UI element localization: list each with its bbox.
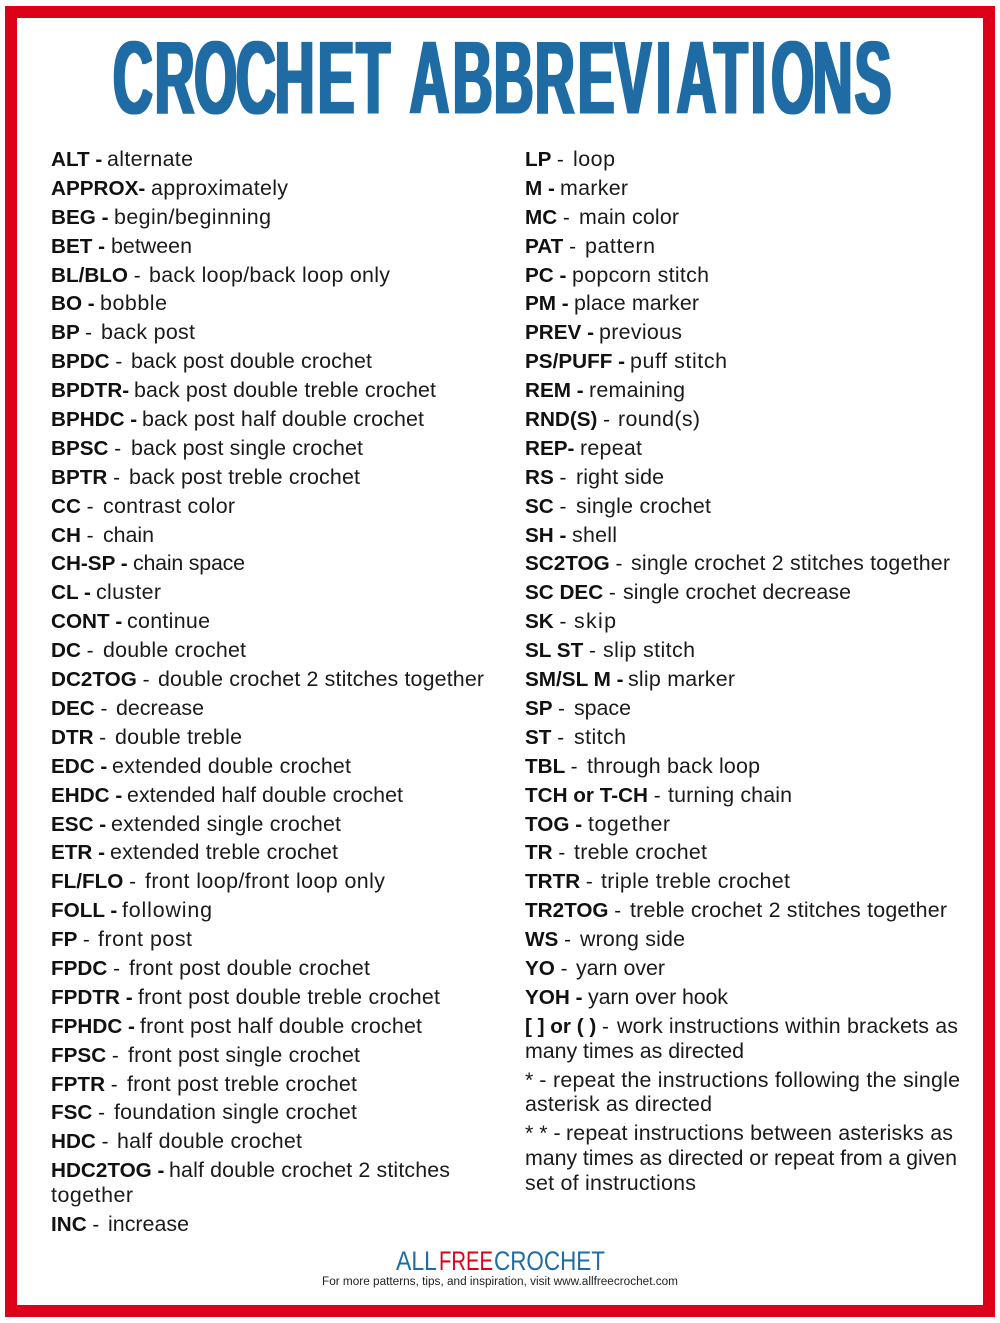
entry: MC: MC - [525, 206, 570, 229]
entry: CONT: CONT - [51, 610, 122, 633]
entry: BEG: BEG - [51, 206, 109, 229]
entry: PM: PM - [525, 292, 569, 315]
entry: REM [525, 378, 685, 402]
entry: SC DEC: single crochet decrease [623, 580, 851, 604]
entry: ST: ST - [525, 726, 564, 749]
entry: SK: SK - [525, 610, 566, 633]
entry: RS: RS - [525, 466, 566, 489]
entry: DTR: DTR - [51, 726, 106, 749]
entry: REP: repeat [580, 436, 642, 460]
note: single asterisk [525, 1068, 960, 1116]
entry: BPDC: BPDC - [51, 350, 122, 373]
entry: BPDTR: BPDTR- [51, 379, 129, 402]
entry: TBL: through back loop [587, 754, 760, 778]
note: double asterisk: many times as directed or repeat from a given [525, 1146, 957, 1170]
entry: PREV: previous [599, 320, 682, 344]
entry: SM/SL M: SM/SL M - [525, 668, 624, 691]
entry: BL/BLO: BL/BLO - [51, 264, 141, 287]
entry: APPROX: APPROX- [51, 177, 145, 200]
entry: DC2TOG: DC2TOG - [51, 668, 149, 691]
entry: APPROX [51, 176, 288, 200]
entry: EDC: EDC - [51, 755, 107, 778]
entry: WS [525, 927, 685, 951]
entry: LP: LP - [525, 148, 564, 171]
entry: DC: DC - [51, 639, 94, 662]
entry: CL [51, 580, 161, 604]
entry: BET: BET - [51, 235, 105, 258]
entry: TCH or T-CH: turning chain [668, 783, 792, 807]
entry: PC: PC - [525, 264, 566, 287]
entry: CH: chain [103, 523, 154, 547]
entry: BL/BLO: back loop/back loop only [149, 263, 390, 287]
entry: FPDC: front post double crochet [129, 956, 370, 980]
entry: FP: front post [98, 927, 192, 951]
entry: PAT: pattern [585, 234, 655, 258]
entry: BPSC: back post single crochet [131, 436, 363, 460]
entry: REP: REP- [525, 437, 575, 460]
entry: HDC2TOG: HDC2TOG - [51, 1159, 165, 1182]
entry: CC: contrast color [103, 494, 235, 518]
entry: FPDC: FPDC - [51, 957, 120, 980]
entry: SC2TOG: SC2TOG - [525, 552, 622, 575]
entry: DEC: decrease [116, 696, 204, 720]
footer tagline: For more patterns, tips, and inspiration, visit www.allfreecrochet.com [322, 1276, 678, 1288]
entry: INC [51, 1212, 189, 1236]
entry: SC DEC: SC DEC - [525, 581, 616, 604]
entry: CH-SP: CH-SP - [51, 552, 128, 575]
entry: BP: back post [101, 320, 195, 344]
entry: HDC: half double crochet [117, 1129, 302, 1153]
entry: PAT: PAT - [525, 235, 576, 258]
entry: YOH: yarn over hook [588, 985, 728, 1009]
entry: CL: CL - [51, 581, 91, 604]
entry: DEC: DEC - [51, 697, 107, 720]
entry: CH: CH - [51, 524, 94, 547]
footer logo: ALL [396, 1246, 437, 1276]
entry: SM/SL M: slip marker [628, 667, 735, 691]
entry: REM: REM - [525, 379, 584, 402]
entry: TR2TOG: TR2TOG - [525, 899, 621, 922]
entry: PS/PUFF: puff stitch [630, 349, 727, 373]
entry: TRTR: triple treble crochet [601, 869, 790, 893]
entry: REM: remaining [589, 378, 685, 402]
entry: TOG: TOG - [525, 813, 582, 836]
entry: DTR [51, 725, 242, 749]
entry: FP: FP - [51, 928, 90, 951]
entry: CH [51, 523, 154, 547]
entry: FL/FLO: FL/FLO - [51, 870, 136, 893]
entry: BO: BO - [51, 292, 95, 315]
entry: EHDC: extended half double crochet [127, 783, 403, 807]
entry: BEG: begin/beginning [114, 205, 271, 229]
entry: YO [525, 956, 665, 980]
entry: FOLL [51, 898, 212, 922]
entry: SC: SC - [525, 495, 566, 518]
note: single asterisk: repeat the instructions following the single [553, 1068, 960, 1092]
entry: ST: stitch [574, 725, 626, 749]
entry: RS [525, 465, 664, 489]
entry: ESC: ESC - [51, 813, 106, 836]
entry: SL ST: slip stitch [603, 638, 695, 662]
entry: DC2TOG: double crochet 2 stitches together [158, 667, 484, 691]
entry: LP [525, 147, 615, 171]
entry: RS: right side [576, 465, 664, 489]
entry: SL ST: SL ST - [525, 639, 596, 662]
entry: YOH: YOH - [525, 986, 583, 1009]
entry: ALT [51, 147, 193, 171]
entry: DEC [51, 696, 204, 720]
entry: ESC: extended single crochet [111, 812, 341, 836]
entry: ALT: ALT - [51, 148, 102, 171]
note: brackets: work instructions within brackets as [616, 1014, 958, 1038]
entry: WS: WS - [525, 928, 571, 951]
entry: SP [525, 696, 631, 720]
entry: INC: INC - [51, 1213, 99, 1236]
entry: EDC: extended double crochet [112, 754, 351, 778]
note: double asterisk: repeat instructions between asterisks as [566, 1121, 953, 1145]
entry: CC: CC - [51, 495, 94, 518]
entry: PAT [525, 234, 655, 258]
entry: RND(S): round(s) [618, 407, 700, 431]
entry: M [525, 176, 628, 200]
entry: PS/PUFF: PS/PUFF - [525, 350, 625, 373]
entry: PC: popcorn stitch [572, 263, 709, 287]
title: CROCHET ABBREVIATIONS [113, 20, 891, 136]
entry: TR: treble crochet [574, 840, 707, 864]
entry: M: M - [525, 177, 555, 200]
entry: SK [525, 609, 616, 633]
entry: TOG: together [588, 812, 670, 836]
entry: FSC: FSC - [51, 1101, 105, 1124]
entry: FL/FLO: front loop/front loop only [145, 869, 385, 893]
entry: PREV: PREV - [525, 321, 594, 344]
entry: HDC2TOG [51, 1158, 450, 1207]
entry: YO: yarn over [576, 956, 665, 980]
entry: TR2TOG: treble crochet 2 stitches together [630, 898, 947, 922]
entry: WS: wrong side [579, 927, 685, 951]
note: single asterisk: * - [525, 1068, 546, 1092]
entry: FPTR: FPTR - [51, 1073, 118, 1096]
entry: BPDC: back post double crochet [131, 349, 372, 373]
entry: INC: increase [108, 1212, 189, 1236]
entry: DTR: double treble [115, 725, 242, 749]
entry: HDC2TOG: together [51, 1183, 133, 1207]
footer logo: FREE [439, 1246, 493, 1276]
entry: MC: main color [579, 205, 679, 229]
entry: EHDC: EHDC - [51, 784, 122, 807]
entry: APPROX: approximately [151, 176, 288, 200]
entry: BPTR: BPTR - [51, 466, 120, 489]
entry: TRTR: TRTR - [525, 870, 593, 893]
entry: ETR: extended treble crochet [110, 840, 338, 864]
entry: BPTR: back post treble crochet [129, 465, 360, 489]
entry: BET [51, 234, 192, 258]
entry: SL ST [525, 638, 695, 662]
entry: SH [525, 523, 617, 547]
entry: BP [51, 320, 195, 344]
entry: FOLL: FOLL - [51, 899, 117, 922]
entry: YOH [525, 985, 728, 1009]
entry: CONT: continue [127, 609, 210, 633]
note: brackets [525, 1014, 958, 1063]
entry: CL: cluster [96, 580, 161, 604]
footer logo [396, 1246, 605, 1276]
entry: FPHDC: front post half double crochet [140, 1014, 422, 1038]
entry: ST [525, 725, 626, 749]
entry: TCH or T-CH: TCH or T-CH - [525, 784, 661, 807]
entry: RND(S) [525, 407, 700, 431]
entry: LP: loop [573, 147, 615, 171]
entry: BPHDC: BPHDC - [51, 408, 137, 431]
note: double asterisk: * * - [525, 1121, 561, 1145]
entry: FSC: foundation single crochet [114, 1100, 357, 1124]
note: brackets: many times as directed [525, 1039, 744, 1063]
entry: HDC2TOG: half double crochet 2 stitches [169, 1158, 450, 1182]
entry: SC DEC [525, 580, 851, 604]
entry: FPDTR: front post double treble crochet [138, 985, 440, 1009]
entry: FPTR: front post treble crochet [127, 1072, 357, 1096]
entry: SM/SL M [525, 667, 735, 691]
entry: SC2TOG: single crochet 2 stitches together [631, 551, 950, 575]
entry: ALT: alternate [107, 147, 193, 171]
entry: BET: between [111, 234, 192, 258]
entry: SK: skip [574, 609, 616, 633]
entry: SP: space [574, 696, 631, 720]
entry: SC: single crochet [576, 494, 711, 518]
footer logo: CROCHET [494, 1246, 605, 1276]
entry: TCH or T-CH [525, 783, 792, 807]
entry: DC: double crochet [103, 638, 246, 662]
entry: RND(S): RND(S) - [525, 408, 610, 431]
entry: MC [525, 205, 679, 229]
entry: SH: SH - [525, 524, 566, 547]
entry: TR: TR - [525, 841, 565, 864]
entry: ETR: ETR - [51, 841, 105, 864]
entry: BO [51, 291, 167, 315]
entry: BO: bobble [100, 291, 167, 315]
entry: CONT [51, 609, 210, 633]
entry: SH: shell [572, 523, 617, 547]
entry: FPSC: FPSC - [51, 1044, 119, 1067]
entry: YO: YO - [525, 957, 568, 980]
entry: TOG [525, 812, 670, 836]
entry: FPSC: front post single crochet [128, 1043, 360, 1067]
right column of abbreviations [525, 147, 960, 1195]
entry: PS/PUFF [525, 349, 727, 373]
entry: BPHDC: back post half double crochet [142, 407, 424, 431]
entry: CH-SP: chain space [133, 551, 245, 575]
note: single asterisk: asterisk as directed [525, 1092, 712, 1116]
entry: FP [51, 927, 192, 951]
entry: TBL: TBL - [525, 755, 577, 778]
note: brackets: [ ] or ( ) - [525, 1015, 609, 1038]
left column of abbreviations [51, 147, 484, 1236]
entry: BP: BP - [51, 321, 92, 344]
entry: BPDTR: back post double treble crochet [134, 378, 436, 402]
entry: REP [525, 436, 642, 460]
entry: PREV [525, 320, 682, 344]
entry: SP: SP - [525, 697, 565, 720]
entry: BPSC: BPSC - [51, 437, 121, 460]
note: double asterisk [525, 1121, 957, 1195]
entry: M: marker [560, 176, 628, 200]
entry: FOLL: following [122, 898, 212, 922]
entry: PM: place marker [574, 291, 699, 315]
note: double asterisk: set of instructions [525, 1171, 696, 1195]
entry: FPHDC: FPHDC - [51, 1015, 135, 1038]
entry: CH-SP [51, 551, 245, 575]
entry: FPDTR: FPDTR - [51, 986, 133, 1009]
entry: HDC: HDC - [51, 1130, 108, 1153]
